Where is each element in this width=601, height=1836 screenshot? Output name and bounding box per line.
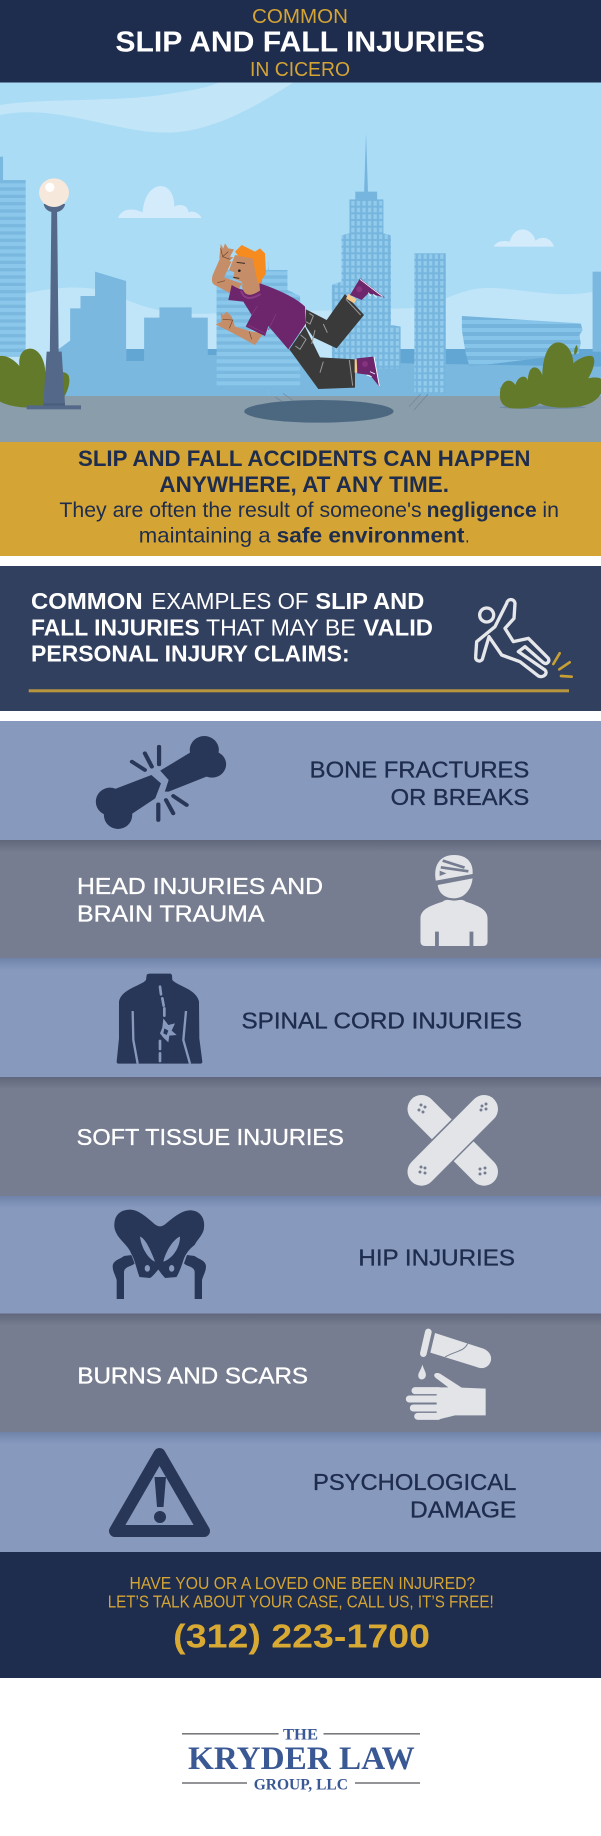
- icon: test tube and hand: [409, 1332, 491, 1420]
- icon: bandaged head: [420, 855, 488, 946]
- icon: crossed bandages: [418, 1102, 488, 1176]
- panel: common examples heading: [0, 566, 601, 711]
- lower arm: [216, 312, 263, 345]
- icon: injured spine: [117, 974, 202, 1064]
- panel: head injuries: [0, 840, 601, 958]
- section heading text: PERSONAL INJURY CLAIMS:: [31, 641, 350, 667]
- left bush: [0, 349, 81, 409]
- label: BRAIN TRAUMA: [77, 901, 265, 927]
- right bush: [499, 342, 601, 409]
- trousers: [306, 294, 364, 348]
- section heading text: EXAMPLES OF: [151, 588, 309, 614]
- shirt: [228, 283, 306, 349]
- shadow under person: [244, 400, 394, 423]
- panel: hip injuries: [0, 1196, 601, 1314]
- logo: The Kryder Law Group: KRYDER LAW: [188, 1741, 415, 1777]
- section heading text: THAT MAY BE: [206, 615, 356, 641]
- intro heading: [78, 446, 530, 497]
- ground: [0, 396, 601, 443]
- label: PSYCHOLOGICAL: [313, 1469, 516, 1495]
- falling person: [212, 243, 385, 389]
- panel: soft tissue injuries: [0, 1077, 601, 1196]
- call to action text: LET’S TALK ABOUT YOUR CASE, CALL US, IT’S FREE!: [108, 1591, 494, 1611]
- label: HIP INJURIES: [358, 1245, 515, 1271]
- label: SOFT TISSUE INJURIES: [77, 1124, 344, 1150]
- phone number: (312) 223-1700: [173, 1617, 430, 1654]
- logo: The Kryder Law Group: THE: [283, 1726, 318, 1743]
- label: [77, 873, 323, 927]
- intro body text: maintaining a: [139, 525, 271, 548]
- panel: burns and scars: [0, 1314, 601, 1432]
- call to action text: HAVE YOU OR A LOVED ONE BEEN INJURED?: [130, 1573, 476, 1593]
- label: [313, 1469, 516, 1523]
- header location: IN CICERO: [250, 59, 350, 81]
- label: DAMAGE: [410, 1497, 516, 1523]
- intro heading: ANYWHERE, AT ANY TIME.: [159, 472, 449, 497]
- head: [229, 255, 265, 290]
- call to action text: [108, 1573, 494, 1611]
- label: BONE FRACTURES: [310, 757, 529, 783]
- main title: SLIP AND FALL INJURIES: [115, 27, 485, 59]
- header panel: [0, 0, 601, 82]
- illustration: city street scene: [0, 82, 601, 443]
- section heading text: VALID: [363, 615, 433, 641]
- panel: intro statement: [0, 442, 601, 556]
- intro body text: They are often the result of someone's: [59, 499, 422, 522]
- intro body text: [59, 499, 559, 548]
- icon: person slipping: [476, 600, 572, 677]
- section heading text: SLIP AND: [315, 588, 424, 614]
- label: OR BREAKS: [391, 784, 529, 810]
- raised arm: [212, 258, 242, 296]
- intro body text: negligence: [427, 499, 537, 522]
- shoes: [346, 294, 357, 303]
- panel: spinal cord injuries: [0, 958, 601, 1077]
- intro body text: .: [465, 525, 470, 548]
- icon: warning triangle: [115, 1454, 204, 1531]
- logo: The Kryder Law Group: [182, 1726, 420, 1793]
- icon: pelvis: [113, 1209, 206, 1299]
- panel: psychological damage: [0, 1432, 601, 1552]
- header kicker: COMMON: [252, 6, 348, 28]
- logo: The Kryder Law Group: GROUP, LLC: [254, 1776, 348, 1793]
- section heading text: COMMON: [31, 588, 143, 614]
- label: [310, 757, 529, 810]
- street lamp globe: [39, 178, 69, 353]
- label: HEAD INJURIES AND: [77, 873, 323, 899]
- sky and skyline: [0, 83, 601, 443]
- icon: broken bone: [96, 736, 226, 829]
- intro heading: SLIP AND FALL ACCIDENTS CAN HAPPEN: [78, 446, 530, 471]
- clouds: [118, 186, 202, 218]
- label: BURNS AND SCARS: [77, 1363, 308, 1389]
- panel: bone fractures: [0, 721, 601, 840]
- label: SPINAL CORD INJURIES: [242, 1007, 522, 1033]
- intro body text: safe environment: [277, 525, 465, 548]
- intro body text: in: [542, 499, 559, 522]
- section heading text: [31, 588, 433, 667]
- panel: call to action: [0, 1552, 601, 1678]
- section heading text: FALL INJURIES: [31, 615, 200, 641]
